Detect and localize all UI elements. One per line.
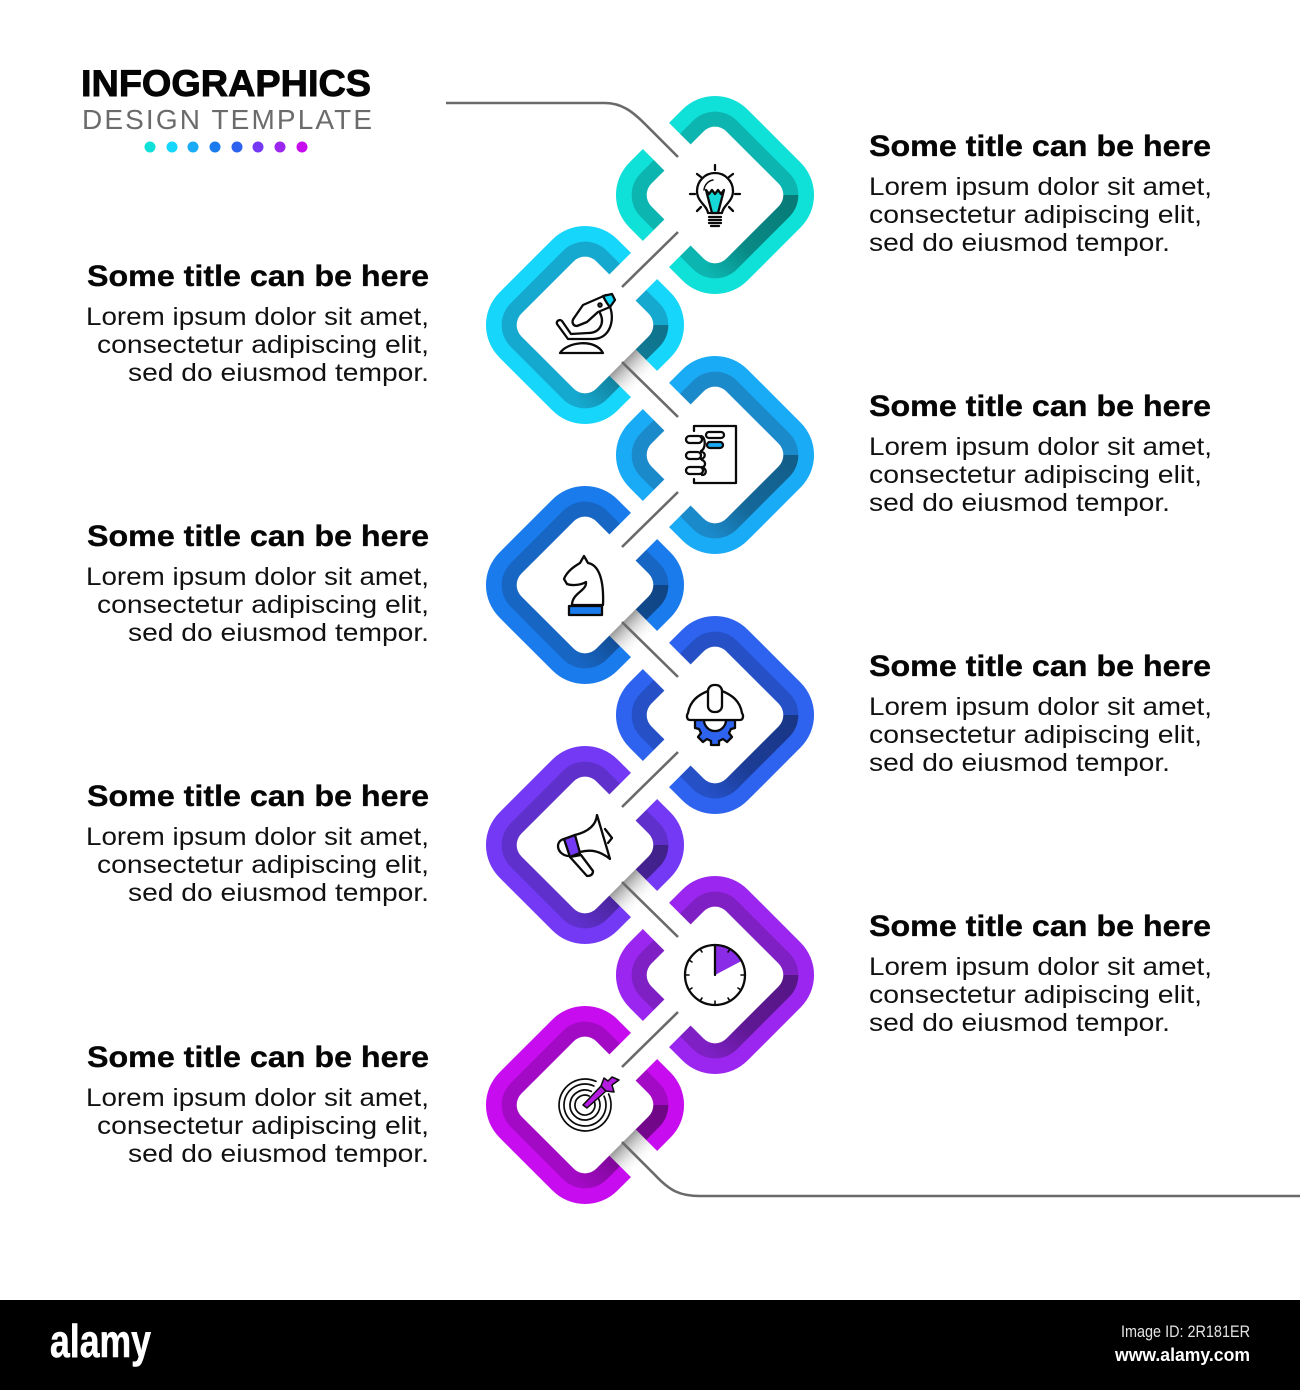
icon: helmet and gear (687, 685, 743, 745)
text block: step 1 (869, 130, 1212, 257)
text block: step 4: Lorem ipsum dolor sit amet, (86, 563, 429, 591)
text block: step 7 (869, 910, 1212, 1037)
text block: step 8 (86, 1041, 429, 1168)
text block: step 8: Some title can be here (87, 1041, 429, 1074)
header: infographics title (81, 63, 372, 152)
text block: step 3: Lorem ipsum dolor sit amet, (869, 433, 1212, 461)
text block: step 1: consectetur adipiscing elit, (869, 201, 1202, 229)
subheading: DESIGN TEMPLATE (82, 104, 372, 135)
text block: step 2: Some title can be here (87, 260, 429, 293)
text block: step 5: sed do eiusmod tempor. (869, 749, 1170, 777)
step 6 diamond: megaphone (486, 746, 684, 944)
step 4 diamond: chess knight (486, 486, 684, 684)
text block: step 1: sed do eiusmod tempor. (869, 229, 1170, 257)
step 5 diamond: helmet and gear (616, 616, 814, 814)
connector lines between diamonds (446, 103, 1300, 1196)
text block: step 6: sed do eiusmod tempor. (128, 879, 429, 907)
step 8 diamond: target (486, 1006, 684, 1204)
step 3 diamond: notebook (616, 356, 814, 554)
text block: step 6 (86, 780, 429, 907)
text block: step 8: sed do eiusmod tempor. (128, 1140, 429, 1168)
text block: step 7: sed do eiusmod tempor. (869, 1009, 1170, 1037)
heading: INFOGRAPHICS (81, 63, 371, 104)
text block: step 5: Some title can be here (869, 650, 1211, 683)
text block: step 4: sed do eiusmod tempor. (128, 619, 429, 647)
text block: step 4: Some title can be here (87, 520, 429, 553)
colour dots (144, 142, 308, 152)
text block: step 7: Some title can be here (869, 910, 1211, 943)
text block: step 1: Lorem ipsum dolor sit amet, (869, 173, 1212, 201)
text block: step 6: consectetur adipiscing elit, (97, 851, 429, 879)
text block: step 1: Some title can be here (869, 130, 1211, 163)
step 2 diamond: microscope (486, 226, 684, 424)
text block: step 5 (869, 650, 1212, 777)
text block: step 7: Lorem ipsum dolor sit amet, (869, 953, 1212, 981)
footer logo: alamy (50, 1315, 151, 1367)
text block: step 4: consectetur adipiscing elit, (97, 591, 429, 619)
text block: step 6: Some title can be here (87, 780, 429, 813)
icon: microscope (557, 294, 615, 353)
text block: step 2: sed do eiusmod tempor. (128, 359, 429, 387)
text block: step 3: sed do eiusmod tempor. (869, 489, 1170, 517)
text block: step 8: consectetur adipiscing elit, (97, 1112, 429, 1140)
text block: step 5: Lorem ipsum dolor sit amet, (869, 693, 1212, 721)
text block: step 4 (86, 520, 429, 647)
step 1 diamond: light bulb (616, 96, 814, 294)
text block: step 6: Lorem ipsum dolor sit amet, (86, 823, 429, 851)
text block: step 2: consectetur adipiscing elit, (97, 331, 429, 359)
icon: target with dart (559, 1077, 619, 1131)
icon: notebook (686, 426, 736, 483)
text block: step 3: Some title can be here (869, 390, 1211, 423)
icon: clock (685, 945, 745, 1005)
footer: alamy bar (0, 1300, 1300, 1390)
icon: light bulb (690, 165, 740, 226)
step 7 diamond: clock (616, 876, 814, 1074)
icon: chess knight (564, 556, 603, 615)
text block: step 8: Lorem ipsum dolor sit amet, (86, 1084, 429, 1112)
text block: step 3: consectetur adipiscing elit, (869, 461, 1202, 489)
text block: step 2 (86, 260, 429, 387)
website: www.alamy.com (1114, 1345, 1250, 1365)
text block: step 7: consectetur adipiscing elit, (869, 981, 1202, 1009)
image id: Image ID: 2R181ER (1121, 1322, 1250, 1341)
text block: step 2: Lorem ipsum dolor sit amet, (86, 303, 429, 331)
text block: step 3 (869, 390, 1212, 517)
icon: megaphone (558, 815, 612, 876)
text block: step 5: consectetur adipiscing elit, (869, 721, 1202, 749)
